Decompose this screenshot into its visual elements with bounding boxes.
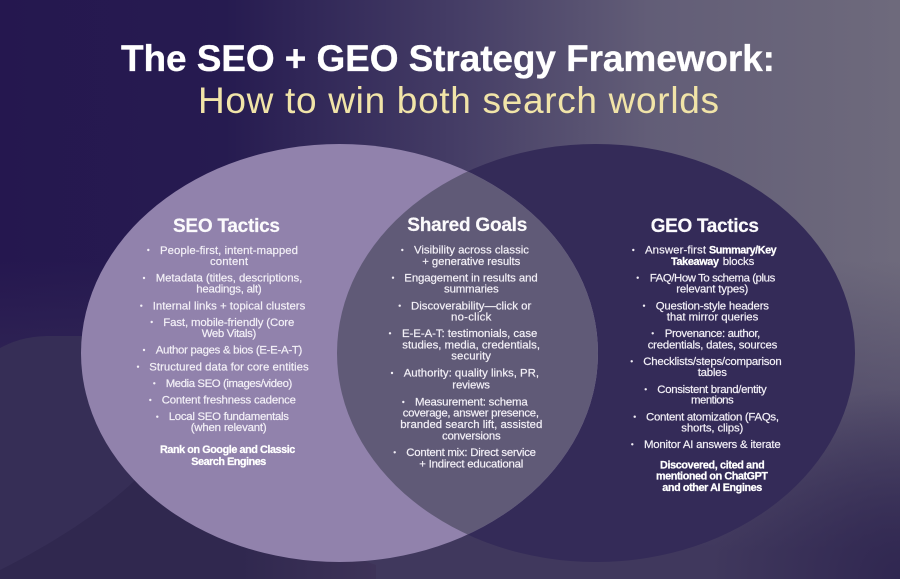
bullet: engagement: Engagement in results and [404, 272, 538, 284]
bullet: visibility: Visibility across classic [414, 245, 529, 257]
bullet: answer-first: Takeaway [671, 256, 719, 268]
bullet: metadata: Metadata (titles, descriptions, [156, 273, 302, 285]
bullet: content atomization: Content atomization (FAQs, [646, 411, 779, 423]
bullet: people-first: People-first, intent-mapped [160, 245, 298, 257]
panel: GEO tactics [630, 216, 782, 494]
bullet: authority: reviews [452, 380, 490, 392]
heading: Shared Goals: Shared Goals [407, 215, 527, 236]
bullet: author pages: Author pages & bios (E-E-A-T) [156, 345, 303, 357]
bullet: measurement: Measurement: schema [415, 397, 528, 409]
venn diagram circles [81, 144, 855, 562]
bullet: content atomization: shorts, clips) [681, 423, 744, 435]
bullet: question-style headers: that mirror queries [667, 311, 759, 323]
bullet: content atomization [634, 411, 779, 435]
bullet: answer-first: Summary/Key [709, 245, 777, 257]
bullet: answer-first: Answer-first [645, 245, 707, 257]
bullet: checklists: tables [698, 367, 727, 379]
bullet: content mix: + Indirect educational [419, 458, 523, 470]
bullet: discoverability: no-click [451, 311, 492, 323]
bullet: measurement: branded search lift, assisted [400, 419, 542, 431]
bullet: visibility: + generative results [422, 256, 521, 268]
callout: GEO outcome: mentioned on ChatGPT [656, 471, 768, 483]
bullet: FAQ schema: relevant types) [676, 284, 749, 296]
bullet: fast [150, 317, 294, 340]
bullet: fast: Web Vitals) [202, 328, 257, 340]
bullet: checklists [630, 356, 782, 379]
bullet: content mix [394, 447, 536, 470]
panel: shared goals [389, 215, 542, 470]
bullet: metadata [143, 273, 302, 296]
bullet: consistent brand: Consistent brand/entity [657, 384, 767, 396]
circle: SEO [81, 144, 598, 562]
bullet: E-E-A-T [389, 328, 540, 362]
heading: SEO Tactics: SEO Tactics [173, 216, 280, 237]
bullet: local SEO [156, 411, 289, 434]
overlap: shared goals [337, 172, 598, 534]
bullet: authority: Authority: quality links, PR, [404, 368, 539, 380]
callout: SEO outcome [160, 444, 295, 468]
bullet: consistent brand: mentions [691, 395, 734, 407]
bullet: fast: Fast, mobile-friendly (Core [163, 317, 294, 329]
bullet: measurement: coverage, answer presence, [403, 408, 539, 420]
title: The SEO + GEO Strategy Framework: [121, 38, 775, 79]
bullet: content mix: Content mix: Direct service [406, 447, 536, 459]
bullet: authority [391, 368, 539, 392]
callout: GEO outcome [656, 459, 768, 494]
bullet: people-first: content [210, 256, 249, 268]
bullet: answer-first [632, 245, 777, 268]
bullet: visibility [401, 245, 529, 268]
bullet: metadata: headings, alt) [196, 284, 262, 296]
panel: SEO tactics [137, 216, 309, 468]
bullet: discoverability: Discoverability—click or [411, 300, 532, 312]
callout: SEO outcome: Search Engines [191, 456, 266, 468]
circle: GEO [337, 144, 855, 562]
bullet: content freshness: Content freshness cadence [162, 395, 296, 407]
bullet: FAQ schema [636, 272, 776, 296]
bullet: structured data: Structured data for core entities [149, 361, 309, 373]
bullet: measurement: conversions [442, 430, 501, 442]
bullet: internal links: Internal links + topical clusters [153, 300, 306, 312]
bullet: local SEO: Local SEO fundamentals [169, 411, 289, 423]
callout: GEO outcome: Discovered, cited and [660, 459, 765, 471]
subtitle: How to win both search worlds [198, 80, 719, 121]
bullet: local SEO: (when relevant) [191, 422, 267, 434]
bullet: provenance: Provenance: author, [665, 328, 760, 340]
bullet: FAQ schema: FAQ/How To schema (plus [650, 272, 776, 284]
bullet: engagement: summaries [444, 284, 499, 296]
callout: GEO outcome: and other AI Engines [662, 482, 762, 494]
bullet: checklists: Checklists/steps/comparison [643, 356, 782, 368]
bullet: provenance: credentials, dates, sources [648, 339, 778, 351]
bullet: discoverability [398, 300, 532, 323]
bullet: media SEO: Media SEO (images/video) [166, 378, 293, 390]
callout: SEO outcome: Rank on Google and Classic [160, 444, 295, 456]
bullet: engagement [392, 272, 538, 296]
heading: GEO Tactics: GEO Tactics [651, 216, 759, 237]
bullet: question-style headers [643, 300, 769, 323]
bullet: people-first [147, 245, 298, 268]
bullet: E-E-A-T: studies, media, credentials, [402, 339, 540, 351]
bullet: provenance [648, 328, 778, 351]
bullet: measurement [400, 397, 542, 442]
bullet: monitor AI answers: Monitor AI answers & iterate [644, 439, 781, 451]
bullet: answer-first: blocks [723, 256, 755, 268]
bullet: question-style headers: Question-style headers [656, 300, 769, 312]
bullet: E-E-A-T: E-E-A-T: testimonials, case [402, 328, 537, 340]
bullet: E-E-A-T: security [451, 350, 491, 362]
bullet: consistent brand [644, 384, 767, 407]
